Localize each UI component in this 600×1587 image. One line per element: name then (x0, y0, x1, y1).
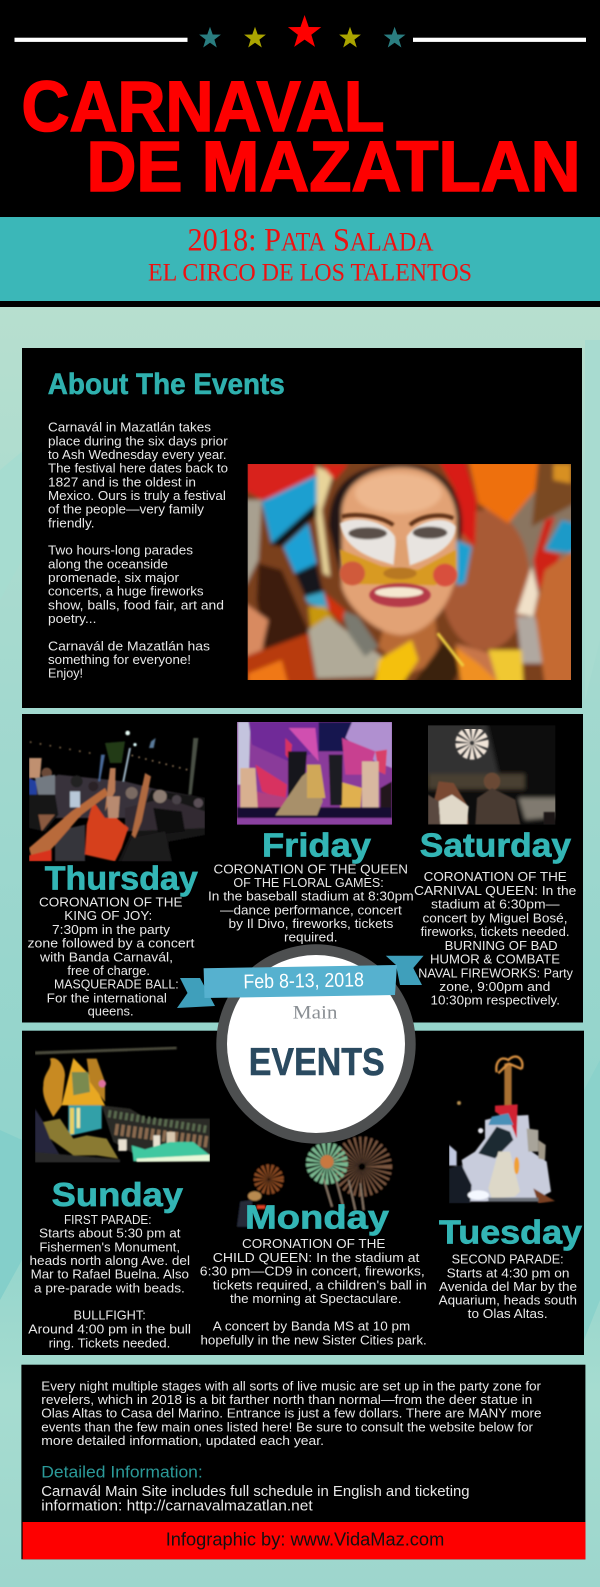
sunday text: Fishermen's Monument, (39, 1239, 180, 1254)
sunday heading: Sunday (52, 1176, 184, 1213)
decorative stars and rules (14, 15, 586, 48)
about text: poetry... (48, 611, 96, 626)
panel: about the events (22, 348, 582, 708)
header band (0, 0, 600, 217)
tuesday text: Avenida del Mar by the (439, 1279, 577, 1294)
about text: Carnavál de Mazatlán has (48, 638, 211, 653)
thursday text: 7:30pm in the party (52, 922, 171, 937)
saturday text: NAVAL FIREWORKS: Party (418, 965, 573, 980)
about text: to Ash Wednesday every year. (48, 447, 227, 462)
monday text: A concert by Banda MS at 10 pm (213, 1318, 410, 1333)
monday heading: Monday (245, 1198, 390, 1235)
saturday text: zone, 9:00pm and (439, 979, 550, 994)
sunday text (28, 1212, 191, 1350)
about text (48, 420, 228, 681)
main events badge (177, 944, 424, 1144)
sunday text: a pre-parade with beads. (34, 1281, 185, 1296)
monday column (200, 1198, 427, 1347)
website text: Carnavál Main Site includes full schedule in English and ticketing (41, 1484, 470, 1500)
saturday text: CARNIVAL QUEEN: In the (414, 883, 576, 898)
tuesday text: to Olas Altas. (468, 1306, 548, 1321)
title (22, 68, 580, 207)
photo: saturday fireworks (428, 725, 556, 825)
about text: 1827 and is the oldest in (48, 474, 196, 489)
panel: thursday to saturday (22, 714, 583, 1022)
subtitle band (0, 217, 600, 307)
photo: friday coronation (237, 722, 392, 825)
title: CARNAVAL (22, 68, 384, 147)
about text: Two hours-long parades (48, 543, 194, 558)
thursday text (28, 895, 195, 1019)
friday text: OF THE FLORAL GAMES: (233, 875, 384, 890)
panel: more information (21, 1365, 585, 1559)
badge label events: EVENTS (249, 1041, 385, 1084)
thursday text: CORONATION OF THE (39, 895, 183, 910)
information paragraph: Every night multiple stages with all sorts of live music are set up in the party zone for (41, 1378, 542, 1393)
subtitle text (148, 223, 472, 287)
ribbon date: Feb 8-13, 2018 (243, 969, 364, 993)
saturday column (414, 827, 576, 1007)
information paragraph (41, 1378, 542, 1448)
about text: friendly. (48, 515, 94, 530)
saturday text: fireworks, tickets needed. (421, 924, 570, 939)
photo: sunday parade float (35, 1046, 210, 1163)
about text: something for everyone! (48, 652, 191, 667)
information paragraph: more detailed information, updated each year. (41, 1433, 324, 1448)
friday text: required. (284, 930, 338, 945)
friday text (208, 861, 414, 945)
subtitle text: EL CIRCO DE LOS TALENTOS (148, 260, 472, 287)
about text: along the oceanside (48, 556, 168, 571)
monday text: hopefully in the new Sister Cities park. (200, 1332, 427, 1347)
sunday text: heads north along Ave. del (30, 1253, 190, 1268)
tuesday text (439, 1252, 577, 1321)
about text: of the people—very family (48, 502, 205, 517)
about text: concerts, a huge fireworks (48, 584, 204, 599)
credit bar (21, 1522, 585, 1559)
saturday heading: Saturday (420, 827, 572, 864)
sunday text: Starts about 5:30 pm at (39, 1226, 181, 1241)
sunday text: BULLFIGHT: (74, 1308, 146, 1323)
saturday text: CORONATION OF THE (424, 869, 567, 884)
thursday text: zone followed by a concert (28, 935, 195, 950)
ribbon (177, 956, 424, 1008)
tuesday text: SECOND PARADE: (452, 1252, 564, 1267)
sunday text: ring. Tickets needed. (49, 1335, 170, 1350)
tuesday heading: Tuesday (439, 1213, 583, 1250)
friday column (208, 827, 414, 945)
friday text: CORONATION OF THE QUEEN (214, 861, 408, 876)
tuesday text: Starts at 4:30 pm on (447, 1265, 570, 1280)
friday heading: Friday (262, 827, 372, 864)
photo: monday fireworks (236, 1136, 394, 1228)
about text: Carnavál in Mazatlán takes (48, 420, 212, 435)
friday text: In the baseball stadium at 8:30pm (208, 889, 414, 904)
tuesday column (439, 1213, 583, 1321)
about text: Enjoy! (48, 666, 83, 681)
monday text: tickets required, a children's ball in (213, 1277, 427, 1292)
subtitle text: 2018: PATA SALADA (188, 223, 434, 259)
friday text: by Il Divo, fireworks, tickets (228, 916, 394, 931)
thursday heading: Thursday (45, 859, 198, 896)
tuesday text: Aquarium, heads south (439, 1293, 577, 1308)
saturday text: concert by Miguel Bosé, (422, 910, 568, 925)
credit bar: Infographic by: www.VidaMaz.com (166, 1528, 444, 1549)
sunday text: Mar to Rafael Buelna. Also (31, 1267, 189, 1282)
saturday text: stadium at 6:30pm— (431, 897, 560, 912)
monday text: CHILD QUEEN: In the stadium at (213, 1250, 420, 1265)
sunday column (28, 1176, 191, 1350)
sunday text: FIRST PARADE: (64, 1212, 152, 1227)
detailed information heading: Detailed Information: (41, 1463, 203, 1482)
about text: Mexico. Ours is truly a festival (48, 488, 226, 503)
panel: sunday to tuesday (22, 1031, 584, 1355)
photo: thursday crowd (29, 730, 205, 862)
monday text: CORONATION OF THE (242, 1236, 386, 1251)
about text: show, balls, food fair, art and (48, 597, 224, 612)
about text: promenade, six major (48, 570, 180, 585)
thursday text: queens. (88, 1004, 134, 1019)
information paragraph: revelers, which in 2018 is a bit farther north than normal—from the deer statue in (41, 1392, 532, 1407)
saturday text (414, 869, 576, 1007)
website text: information: http://carnavalmazatlan.net (41, 1499, 313, 1515)
thursday text: MASQUERADE BALL: (54, 976, 179, 991)
badge circle (216, 944, 416, 1144)
saturday text: BURNING OF BAD (445, 938, 558, 953)
website text (41, 1484, 470, 1515)
thursday column (28, 859, 198, 1019)
heading: about: About The Events (48, 368, 285, 401)
saturday text: 10:30pm respectively. (430, 992, 560, 1007)
monday text (200, 1236, 427, 1347)
monday text: 6:30 pm—CD9 in concert, fireworks, (200, 1264, 425, 1279)
information paragraph: Olas Altas to Casa del Marino. Entrance is just a few dollars. There are MANY more (41, 1406, 542, 1421)
title: DE MAZATLAN (86, 128, 580, 207)
about text: place during the six days prior (48, 433, 228, 448)
thursday text: For the international (47, 990, 167, 1005)
sunday text: Around 4:00 pm in the bull (28, 1322, 191, 1337)
about text: The festival here dates back to (48, 461, 228, 476)
saturday text: HUMOR & COMBATE (430, 951, 560, 966)
friday text: —dance performance, concert (220, 902, 402, 917)
photo: smiling carnival dancer (248, 464, 571, 680)
information paragraph: events than the few main ones listed here! Be sure to consult the website below for (41, 1419, 534, 1434)
monday text: the morning at Spectaculare. (230, 1291, 402, 1306)
thursday text: free of charge. (67, 963, 150, 978)
photo: tuesday float (449, 1054, 555, 1204)
thursday text: KING OF JOY: (64, 908, 152, 923)
badge label main: Main (293, 1002, 338, 1023)
thursday text: with Banda Carnavál, (39, 949, 173, 964)
